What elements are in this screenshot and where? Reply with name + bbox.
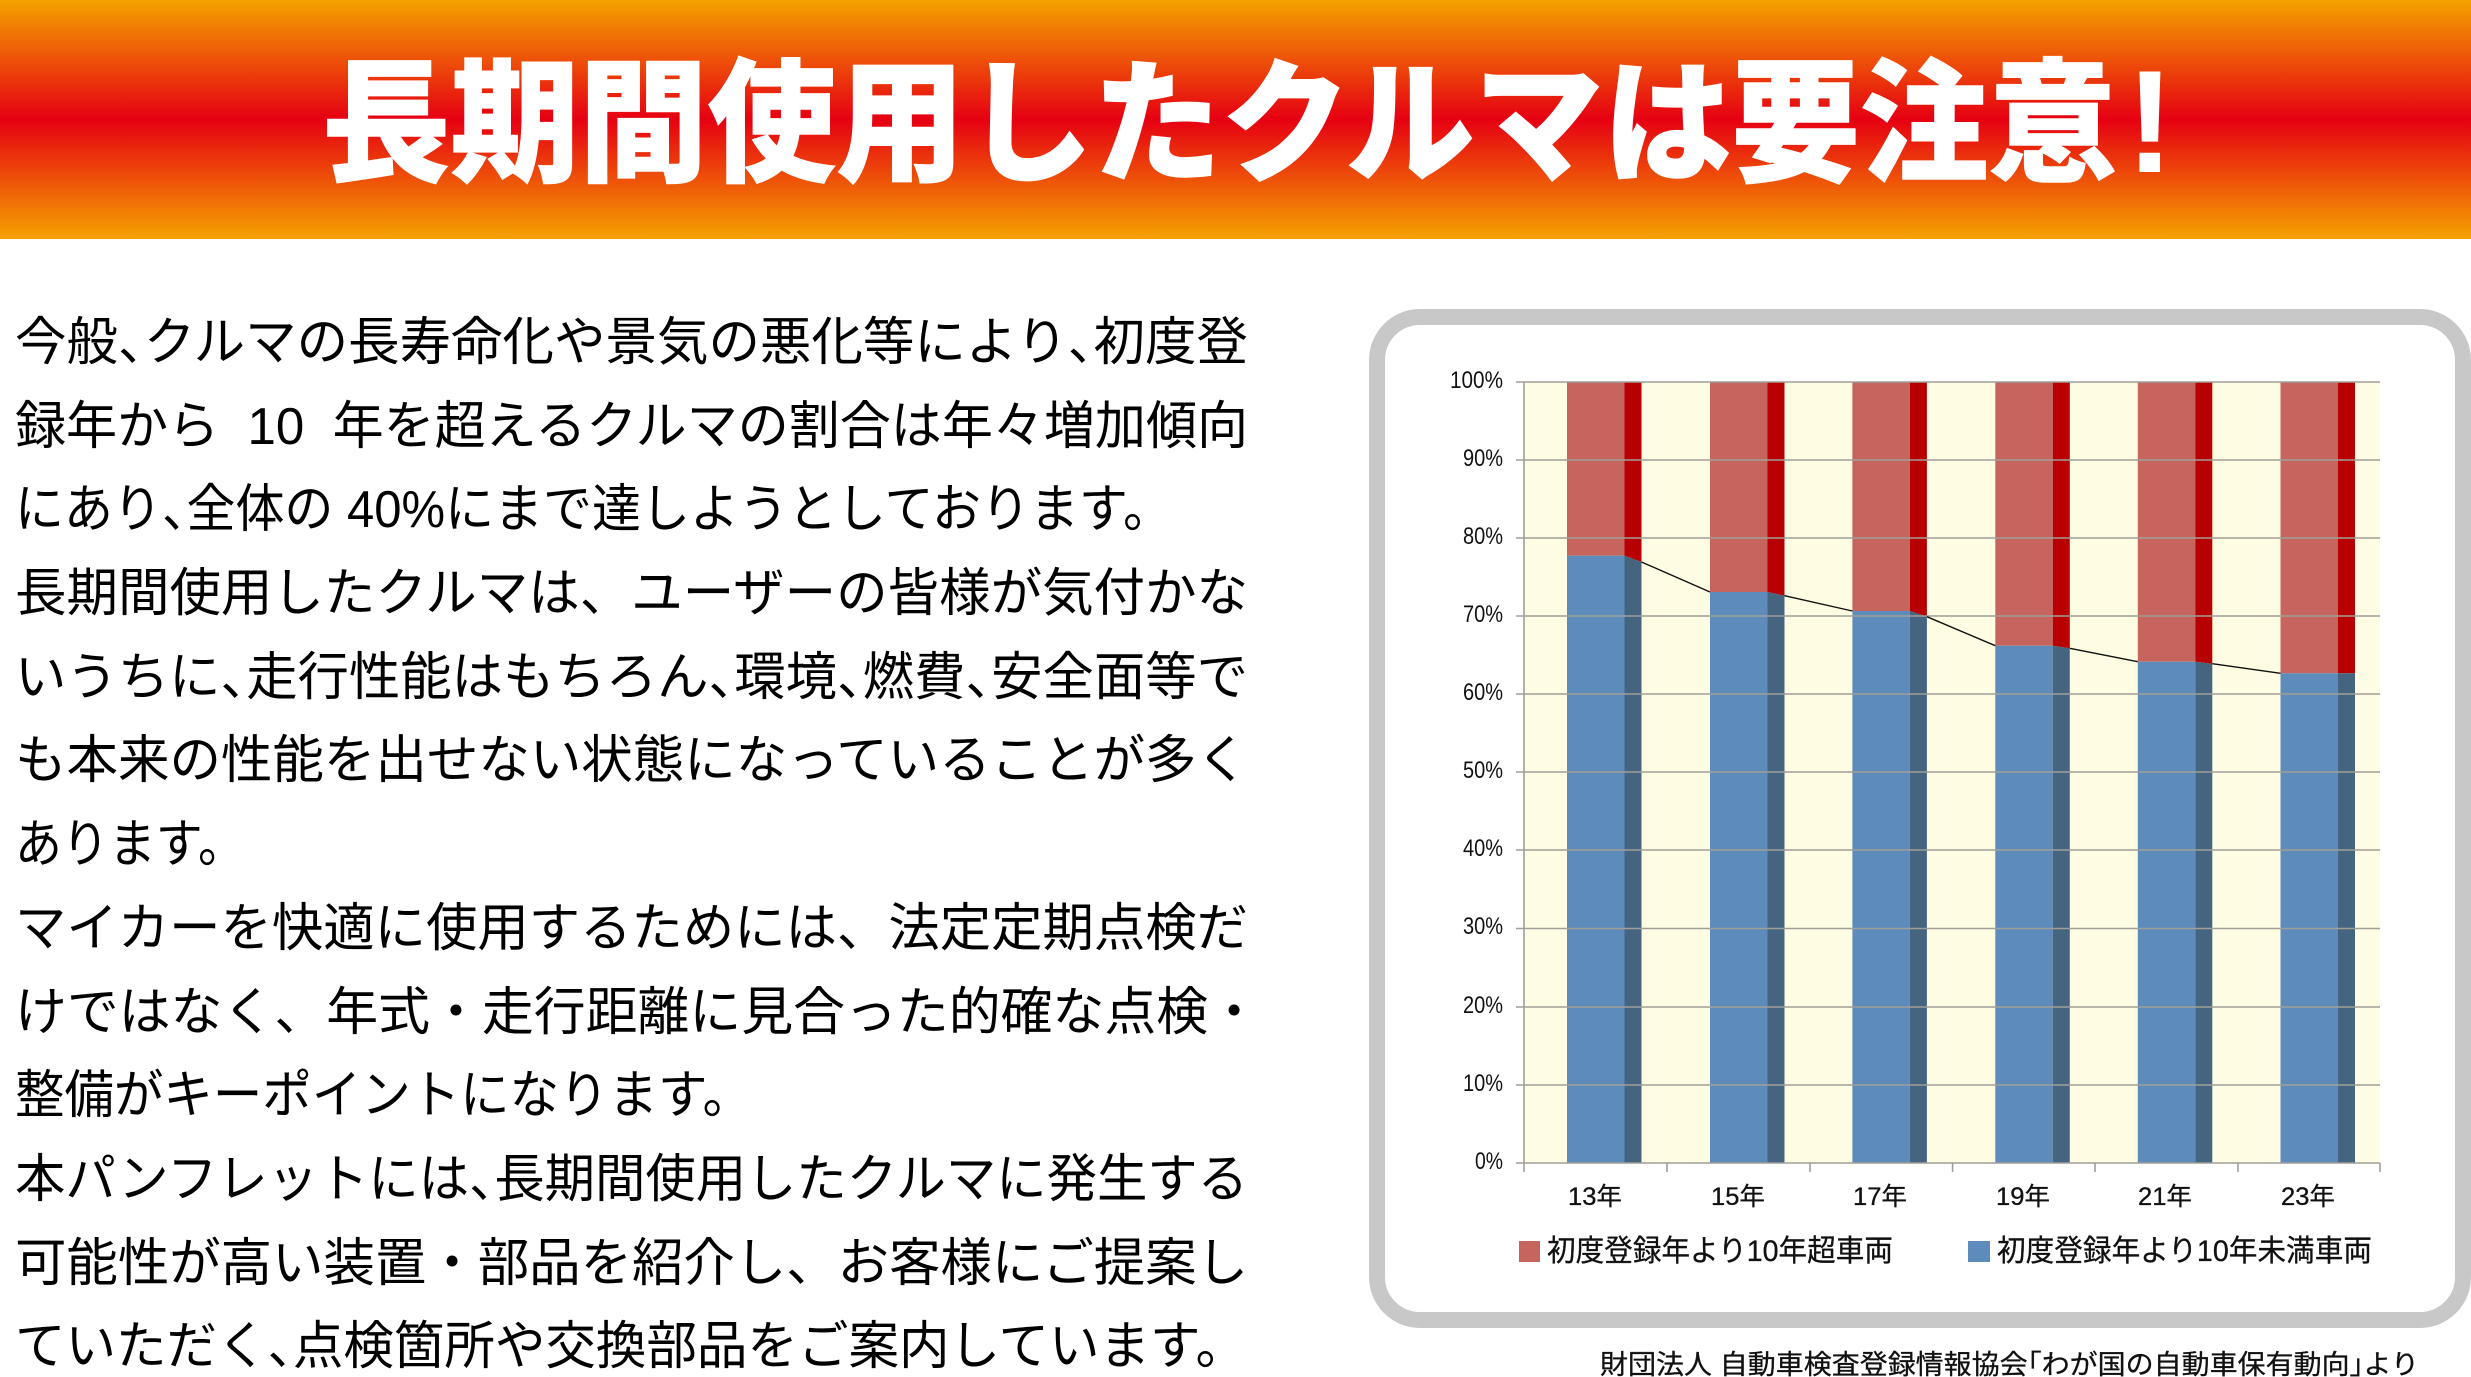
x axis labels: 21年 <box>2138 1183 2192 1211</box>
y axis labels: 30% <box>1463 913 1503 940</box>
y axis labels: 50% <box>1463 757 1503 784</box>
body text: マイカーを快適に使用するためには、法定定期点検だ <box>15 900 1248 958</box>
chart panel <box>1377 317 2463 1320</box>
y axis labels: 10% <box>1463 1070 1503 1097</box>
legend: over 10 years: 初度登録年より10年超車両 <box>1547 1235 1893 1268</box>
body text: にあり、全体の 40%にまで達しようとしております。 <box>15 481 1172 539</box>
y axis labels: 70% <box>1463 601 1503 628</box>
y axis labels: 40% <box>1463 835 1503 862</box>
y axis labels: 0% <box>1475 1148 1503 1175</box>
x axis labels: 19年 <box>1996 1183 2050 1211</box>
body text: 録年から 10 年を超えるクルマの割合は年々増加傾向 <box>15 398 1248 456</box>
x axis labels <box>1568 1183 2335 1211</box>
x axis labels: 13年 <box>1568 1183 1622 1211</box>
y axis labels: 100% <box>1450 367 1503 394</box>
body text: 整備がキーポイントになります。 <box>15 1067 752 1125</box>
title: 長期間使用したクルマは要注意 <box>322 51 2117 200</box>
y axis labels <box>1450 367 1503 1175</box>
body text: 本パンフレットには、長期間使用したクルマに発生する <box>15 1151 1248 1209</box>
x axis labels: 15年 <box>1711 1183 1765 1211</box>
body text: 今般、クルマの長寿命化や景気の悪化等により、初度登 <box>15 314 1248 372</box>
body text: あります。 <box>15 816 245 874</box>
title exclamation mark: ! <box>2126 40 2174 203</box>
body text: いうちに、走行性能はもちろん、環境、燃費、安全面等で <box>15 649 1248 707</box>
y axis labels: 20% <box>1463 992 1503 1019</box>
x axis labels: 17年 <box>1853 1183 1907 1211</box>
y axis labels: 60% <box>1463 679 1503 706</box>
trend line <box>1642 562 2280 673</box>
blue bars <box>1567 556 2355 1163</box>
grid lines <box>1516 382 2380 1172</box>
legend: under 10 years: 初度登録年より10年未満車両 <box>1997 1235 2372 1268</box>
body text: けではなく、年式・走行距離に見合った的確な点検・ <box>15 984 1260 1042</box>
y axis labels: 80% <box>1463 523 1503 550</box>
body text: 可能性が高い装置・部品を紹介し、お客様にご提案し <box>15 1235 1248 1293</box>
x axis labels: 23年 <box>2281 1183 2335 1211</box>
body text <box>15 314 1260 1376</box>
body text: ていただく、点検箇所や交換部品をご案内しています。 <box>15 1318 1246 1376</box>
y axis labels: 90% <box>1463 445 1503 472</box>
body text: 長期間使用したクルマは、ユーザーの皆様が気付かな <box>15 565 1248 623</box>
body text: も本来の性能を出せない状態になっていることが多く <box>15 732 1248 790</box>
chart plot <box>1516 382 2380 1172</box>
red bars <box>1567 382 2355 673</box>
title banner <box>0 0 2471 239</box>
